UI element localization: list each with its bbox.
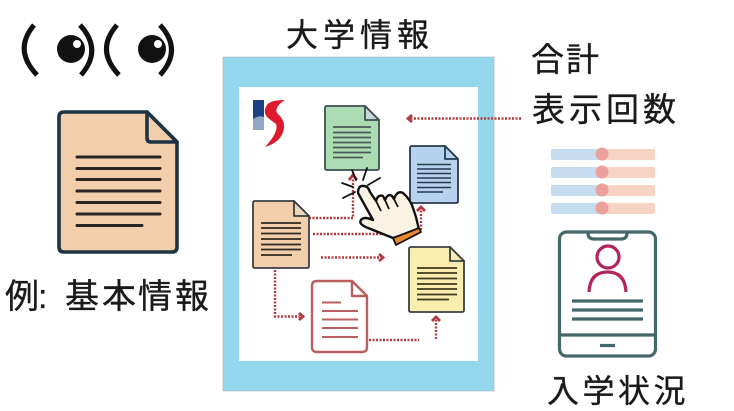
label: example basic info: 例:基本情報 [5,278,209,316]
icon: large document [59,112,177,252]
icon: eyes [24,25,172,75]
arrows: dotted connections [275,118,521,340]
chart: slider bars [551,148,655,214]
heading: university information: 大学情報 [286,17,434,53]
icon: blue document [410,146,458,203]
icon: yellow document [409,247,464,312]
icon: green document [325,106,379,170]
icon: red outline document [312,281,367,352]
icon: tan document [253,201,309,268]
label: enrollment status: 入学状況 [547,373,689,409]
label: total views line 1: 合計 [531,41,601,78]
icon: university logo [253,100,285,147]
icon: clicking hand [342,168,421,245]
arrowheads [299,115,440,321]
label: total views line 2: 表示回数 [532,91,680,128]
panel: university information [223,57,521,391]
icon: smartphone profile [560,232,656,356]
